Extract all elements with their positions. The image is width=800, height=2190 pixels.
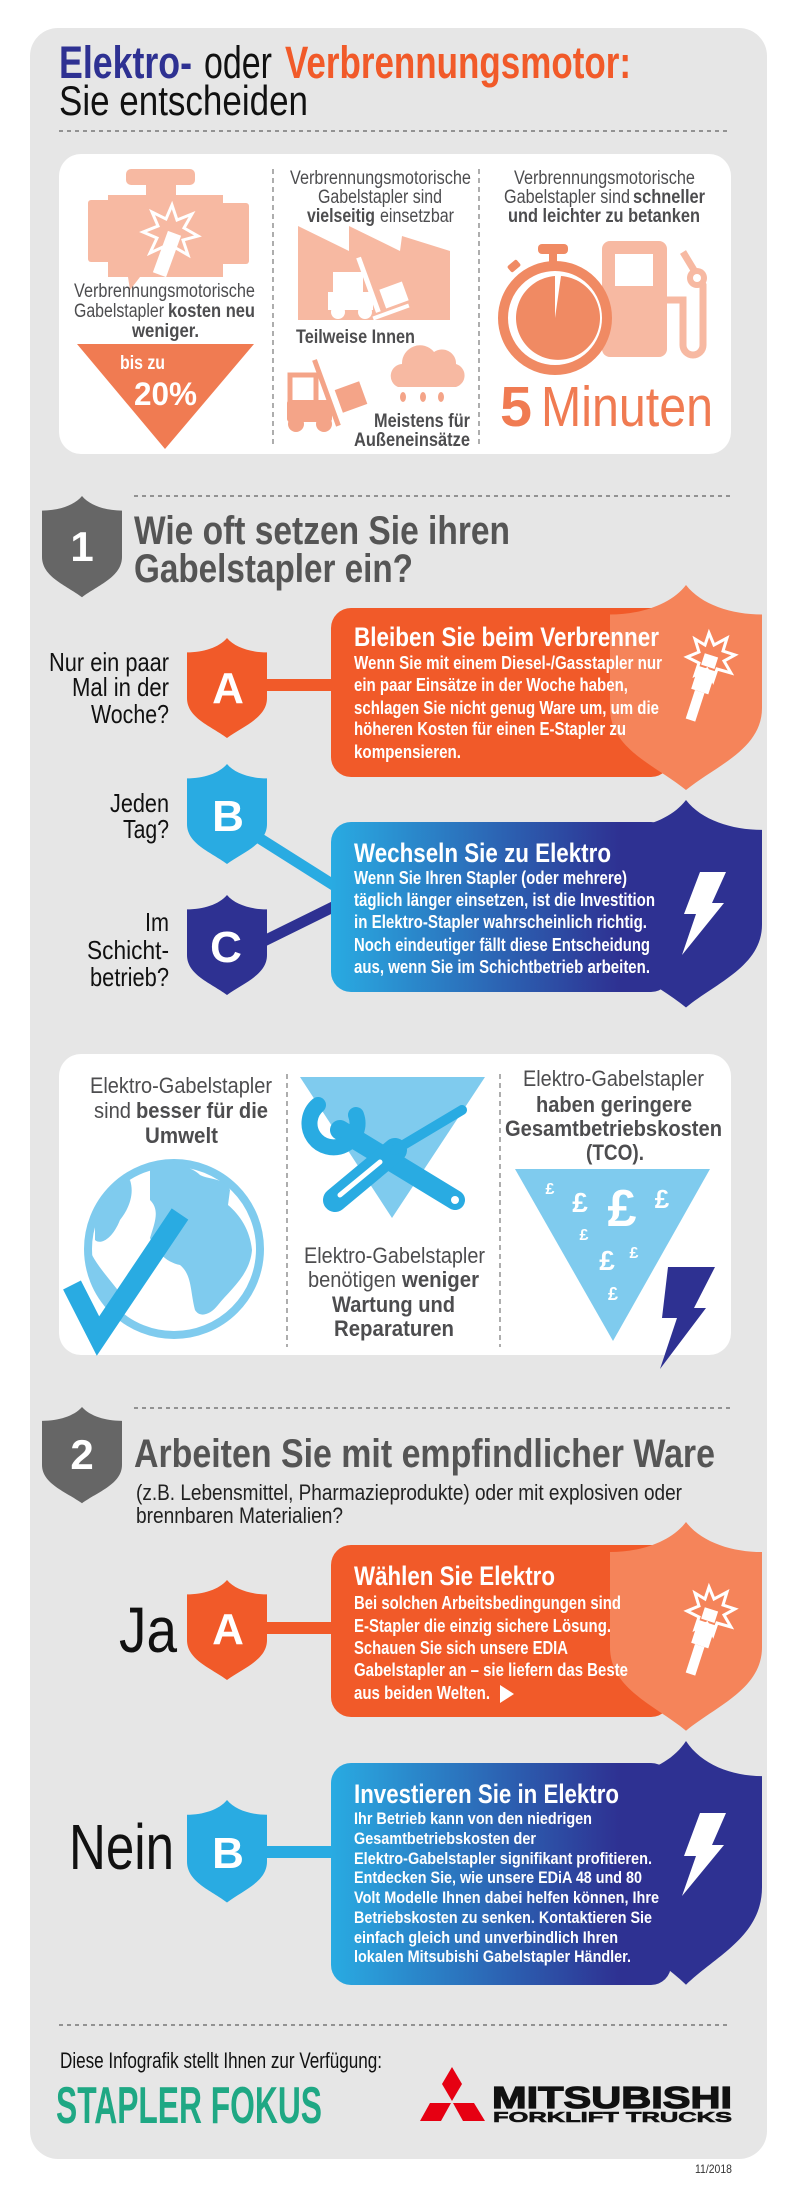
title: Verbrennungsmotor: [285,37,631,88]
icon: pound triangle: £ [572,1187,588,1218]
icon: pound triangle: £ [630,1245,639,1262]
title [59,37,631,124]
callout: Wechseln Sie zu Elektro: Noch eindeutiger fällt diese Entscheidung [354,935,650,955]
option Nein B: Nein [69,1811,174,1883]
callout: Bleiben Sie beim Verbrenner: kompensieren. [354,742,461,762]
icon: pound triangle: £ [599,1245,615,1276]
option A: few times a week [49,638,335,738]
callout: Investieren Sie in Elektro: lokalen Mitsubishi Gabelstapler Händler. [354,1947,631,1966]
text: less maintenance: benötigen [308,1267,396,1292]
callout: Investieren Sie in Elektro: Entdecken Sie, wie unsere EDiA 48 und 80 [354,1868,642,1887]
text: faster refuel: Gabelstapler sind [504,187,630,208]
title: Sie entscheiden [59,77,308,124]
callout: Bleiben Sie beim Verbrenner [331,585,762,790]
option A: few times a week: Mal in der [72,672,169,702]
panel: combustion advantages [59,154,731,454]
icon: blue bolt [660,1267,715,1369]
text: 5 Minuten: 5 [500,375,532,439]
icon: engine [88,169,249,290]
icon: pound triangle: £ [580,1227,589,1244]
text: less maintenance: Wartung und [332,1292,455,1317]
text: costs less [74,281,255,342]
option B: every day [110,764,335,886]
panel: electric advantages [59,1054,731,1369]
section 1 heading: Wie oft setzen Sie ihren [134,509,510,553]
text: versatile: Verbrennungsmotorische [290,168,471,189]
text: costs less: Gabelstapler [74,301,165,322]
text: better for environment: besser für die [136,1098,268,1123]
label: Meistens für Außeneinsätze [354,411,471,451]
option B: every day: Jeden [110,788,169,818]
option A: few times a week: Woche? [91,699,169,729]
callout: Wählen Sie Elektro: Gabelstapler an – sie liefern das Beste [354,1660,628,1680]
section 1 heading: Gabelstapler ein? [134,547,413,591]
callout: Wählen Sie Elektro: E-Stapler die einzig sichere Lösung. [354,1616,611,1636]
option B: every day: Tag? [123,814,169,844]
text: lower TCO: haben geringere [536,1092,692,1117]
text: costs less: weniger. [131,321,199,342]
icon: outdoor forklift and rain [287,345,465,432]
callout: Bleiben Sie beim Verbrenner: Bleiben Sie beim Verbrenner [354,622,659,652]
callout: Wählen Sie Elektro: Wählen Sie Elektro [354,1561,555,1591]
option C: shift operation: Schicht- [87,935,169,965]
text: less maintenance: Reparaturen [334,1316,454,1341]
section 1 heading [42,496,510,597]
text: faster refuel: Verbrennungsmotorische [514,168,695,189]
section 2 heading: Arbeiten Sie mit empfindlicher Ware [134,1432,715,1476]
callout: Bleiben Sie beim Verbrenner: höheren Kosten für einen E-Stapler zu [354,719,626,739]
text: less maintenance [304,1243,485,1341]
section 2 heading: brennbaren Materialien? [136,1503,343,1528]
callout: Wechseln Sie zu Elektro: in Elektro-Stapler wahrscheinlich richtig. [354,912,647,932]
option C: shift operation: C [210,923,242,972]
option Ja A: A [212,1605,244,1654]
option Nein B: B [212,1829,244,1878]
text: lower TCO: Gesamtbetriebskosten [505,1116,722,1141]
callout: Investieren Sie in Elektro: Volt Modelle Ihnen dabei helfen können, Ihre [354,1888,659,1907]
callout: Wählen Sie Elektro: aus beiden Welten. [354,1683,490,1703]
text: versatile: Gabelstapler sind [318,187,442,208]
title: oder [204,37,272,88]
text: lower TCO: Elektro-Gabelstapler [523,1066,704,1091]
icon: pound triangle [515,1169,710,1341]
text: better for environment [90,1073,272,1148]
callout: Wechseln Sie zu Elektro: Wechseln Sie zu Elektro [354,838,611,868]
text: better for environment: Umwelt [145,1123,219,1148]
text: faster refuel [504,168,706,227]
icon: shield 1 [42,496,122,597]
callout: Investieren Sie in Elektro [331,1741,762,1985]
icon: lightning bolt [682,1813,726,1896]
callout: Investieren Sie in Elektro: Betriebskosten zu senken. Kontaktieren Sie [354,1908,652,1927]
footer: provided by: Diese Infografik stellt Ihnen zur Verfügung: [60,2048,382,2073]
icon: globe with checkmark [72,1163,260,1336]
callout: Wechseln Sie zu Elektro: Wenn Sie Ihren Stapler (oder mehrere) [354,868,627,888]
text: better for environment: Elektro-Gabelstapler [90,1073,272,1098]
logo: Mitsubishi Forklift Trucks: FORKLIFT TRUCKS [493,2109,732,2126]
logo: Mitsubishi Forklift Trucks [420,2067,732,2126]
text: faster refuel: und leichter zu betanken [508,206,700,227]
callout: Wechseln Sie zu Elektro: täglich länger einsetzen, ist die Investition [354,890,655,910]
text: versatile: einsetzbar [380,206,455,227]
text: lower TCO [505,1066,722,1165]
callout: Wählen Sie Elektro: Bei solchen Arbeitsbedingungen sind [354,1593,621,1613]
triangle: bis zu 20% [77,344,254,449]
icon: stopwatch and fuel pump [503,241,707,370]
option Ja A [119,1580,335,1680]
icon: factory with forklift [298,226,450,320]
callout: Bleiben Sie beim Verbrenner: schlagen Sie nicht genug Ware um, um die [354,698,659,718]
option C: shift operation: Im [145,907,169,937]
icon: shield 2 [42,1407,122,1503]
icon: wrench and screwdriver [300,1077,485,1218]
callout: Wählen Sie Elektro: Schauen Sie sich unsere EDIA [354,1638,568,1658]
option C: shift operation [87,895,335,995]
icon: pound triangle: £ [655,1184,670,1214]
text: versatile: vielseitig [307,206,375,227]
icon: pound triangle: £ [546,1181,555,1198]
label: Teilweise Innen: Teilweise Innen [296,327,415,348]
callout: Wählen Sie Elektro [331,1522,762,1731]
option A: few times a week: Nur ein paar [49,647,169,677]
option Ja A: Ja [119,1594,177,1666]
option C: shift operation: betrieb? [90,962,169,992]
icon: shield 2: 2 [70,1431,94,1478]
triangle: bis zu 20%: bis zu [120,353,165,374]
label: Meistens für Außeneinsätze: Meistens für [374,411,471,432]
text: less maintenance: Elektro-Gabelstapler [304,1243,485,1268]
triangle: bis zu 20%: 20% [134,376,197,412]
callout: Investieren Sie in Elektro: Elektro-Gabelstapler signifikant profitieren. [354,1849,652,1868]
icon: spark plug [682,1587,735,1677]
icon: spark plug [682,633,735,723]
date: 11/2018 [695,2162,732,2176]
icon: pound triangle: £ [608,1180,637,1238]
icon: pound triangle: £ [608,1284,618,1304]
section 2 heading [42,1407,715,1528]
callout: Investieren Sie in Elektro: Investieren Sie in Elektro [354,1779,619,1809]
text: less maintenance: weniger [401,1267,479,1292]
option A: few times a week: A [212,664,244,713]
section 2 heading: (z.B. Lebensmittel, Pharmazieprodukte) oder mit explosiven oder [136,1480,682,1505]
callout: Investieren Sie in Elektro: Gesamtbetriebskosten der [354,1829,536,1848]
text: 5 Minuten: Minuten [541,375,713,439]
icon: shield 1: 1 [70,523,94,570]
callout: Bleiben Sie beim Verbrenner: Wenn Sie mit einem Diesel-/Gasstapler nur [354,653,662,673]
callout: Bleiben Sie beim Verbrenner: ein paar Einsätze in der Woche haben, [354,675,628,695]
text: costs less: kosten neu [168,301,255,322]
callout: Wechseln Sie zu Elektro [331,800,762,1008]
callout: Investieren Sie in Elektro: Ihr Betrieb kann von den niedrigen [354,1809,592,1828]
option B: every day: B [212,792,244,841]
callout: Investieren Sie in Elektro: einfach gleich und unverbindlich Ihren [354,1928,618,1947]
logo: Mitsubishi Forklift Trucks: MITSUBISHI [492,2080,732,2115]
text: versatile [290,168,471,227]
icon: lightning bolt [682,872,726,955]
title: Elektro- [59,37,192,88]
logo: Stapler Fokus: STAPLER FOKUS [56,2077,322,2135]
callout: Wechseln Sie zu Elektro: aus, wenn Sie im Schichtbetrieb arbeiten. [354,957,650,977]
text: faster refuel: schneller [633,187,706,208]
label: Meistens für Außeneinsätze: Außeneinsätze [354,430,470,451]
option Nein B [69,1800,335,1902]
text: lower TCO: (TCO). [586,1140,644,1165]
text: better for environment: sind [94,1098,131,1123]
text: costs less: Verbrennungsmotorische [74,281,255,302]
